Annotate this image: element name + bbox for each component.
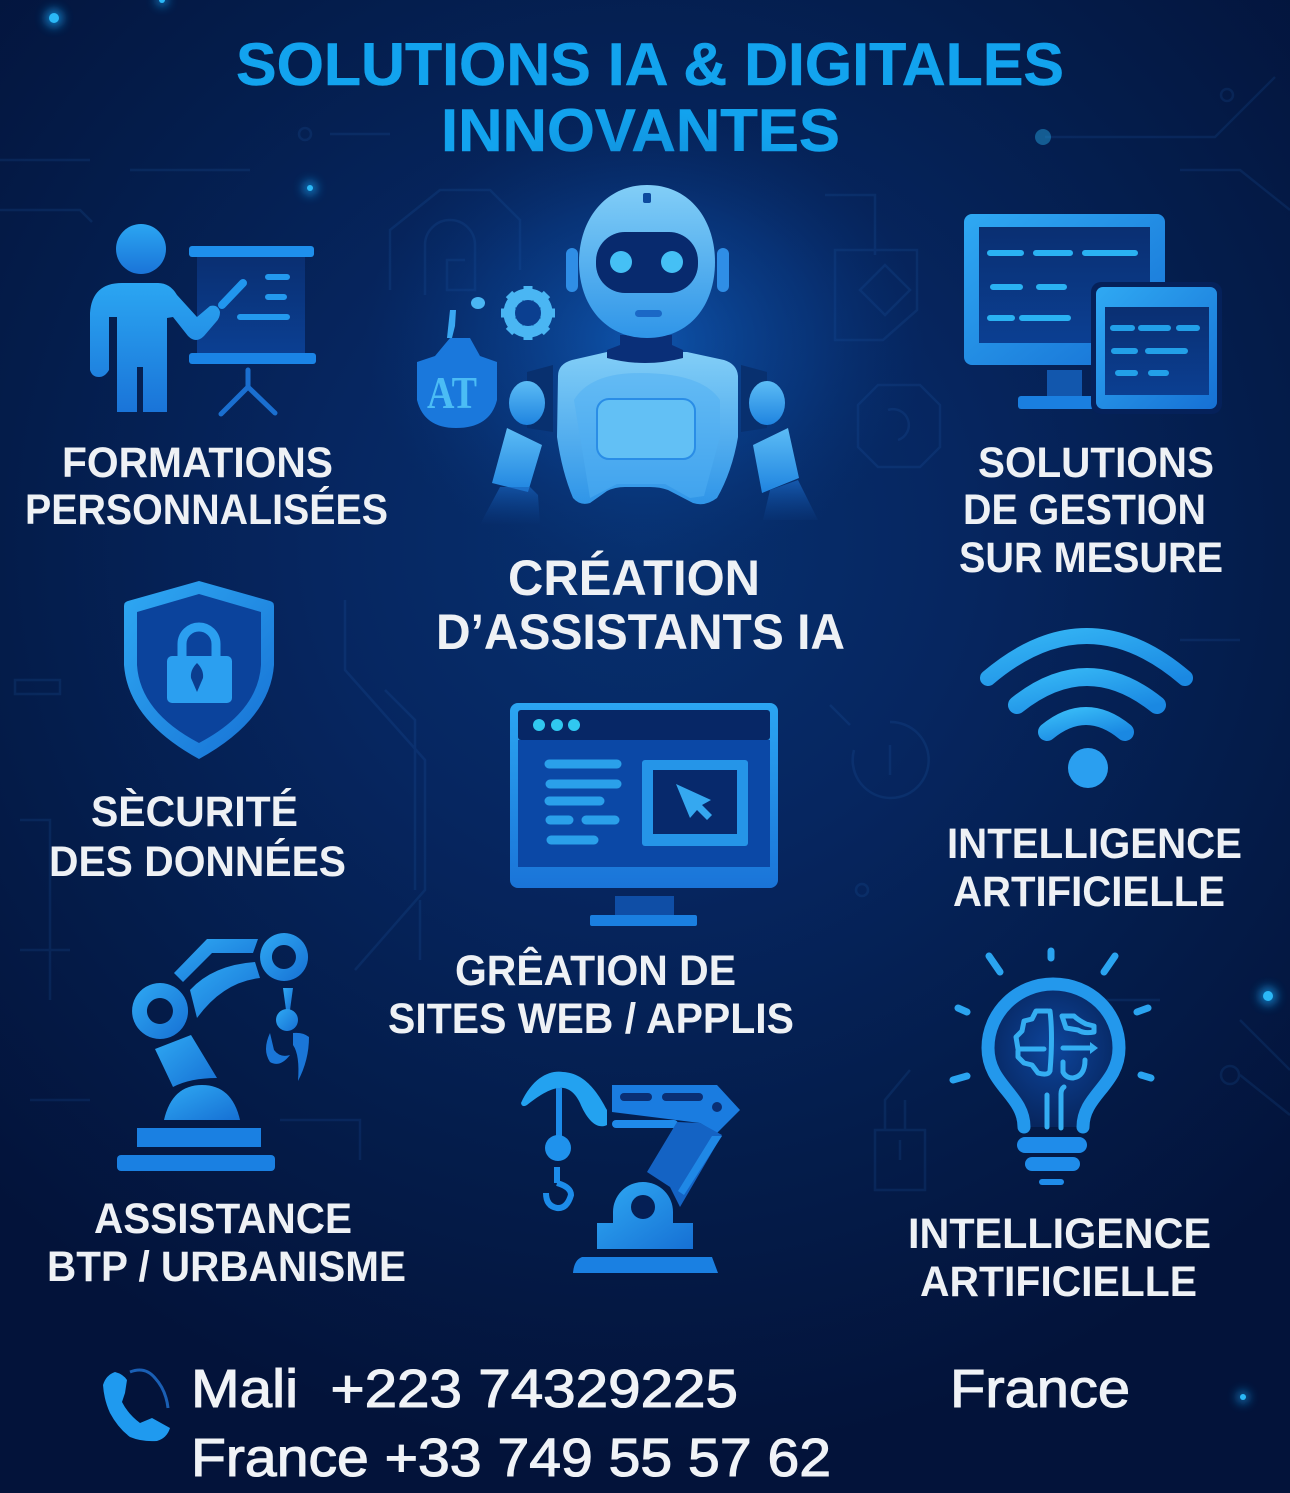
- window with cursor: [642, 760, 748, 846]
- label: security: DES DONNÉES: [49, 838, 346, 886]
- contact: France label: France: [950, 1359, 1130, 1419]
- label: intelligence artificielle 1: ARTIFICIELLE: [953, 868, 1225, 916]
- label: security: [49, 788, 346, 886]
- crane arm: [647, 1122, 722, 1207]
- contact: Mali phone: Mali +223 74329225: [191, 1359, 738, 1419]
- icon: security shield: [124, 581, 274, 759]
- crane boom: [612, 1085, 740, 1133]
- robot mouth: [635, 310, 662, 317]
- robot neck: [607, 335, 683, 363]
- text lines: [549, 764, 617, 840]
- crane hook: [546, 1088, 571, 1208]
- padlock: [167, 627, 232, 703]
- robot shoulders: [509, 381, 545, 425]
- label: assistants: D’ASSISTANTS IA: [436, 604, 845, 660]
- monitor header: [518, 710, 770, 740]
- arm segments: [174, 939, 258, 982]
- label: formations: [25, 439, 388, 534]
- label: web: GRÊATION DE: [455, 946, 736, 995]
- icon: phone: [103, 1370, 170, 1441]
- icon: trainer at presentation board: [90, 224, 316, 414]
- robot chest panel: [597, 399, 695, 459]
- board stand: [221, 370, 275, 414]
- icon: AI robot: [365, 110, 925, 570]
- board text lines: [240, 277, 287, 317]
- label: intelligence artificielle 2: INTELLIGENCE: [908, 1210, 1211, 1258]
- gear: [501, 286, 555, 340]
- robot ears: [566, 248, 578, 292]
- gripper: [283, 988, 293, 1010]
- label: web: SITES WEB / APPLIS: [388, 995, 794, 1043]
- rays: [953, 951, 1151, 1080]
- label: BTP: [47, 1195, 406, 1291]
- title: SOLUTIONS IA & DIGITALES: [236, 31, 1064, 98]
- label: gestion: DE GESTION: [963, 486, 1206, 534]
- label: security: SÈCURITÉ: [91, 788, 298, 836]
- robot head: [579, 185, 715, 338]
- pointer: [222, 283, 243, 305]
- board bars: [189, 246, 314, 257]
- bulb base: [1017, 1137, 1087, 1185]
- label: BTP: BTP / URBANISME: [47, 1243, 406, 1291]
- AI badge: AT: [427, 368, 477, 418]
- monitor frame: [964, 214, 1165, 365]
- monitor lines: [990, 253, 1135, 318]
- monitor screen: [518, 740, 770, 867]
- title: INNOVANTES: [441, 97, 840, 164]
- brain arrow: [1090, 1042, 1098, 1054]
- robot arms: [527, 365, 767, 432]
- background circuit pattern: [0, 77, 1290, 1190]
- robot eyes: [610, 251, 632, 273]
- robot visor: [596, 232, 698, 293]
- tablet lines: [1113, 328, 1197, 373]
- bulb glass: [988, 984, 1119, 1127]
- label: formations: FORMATIONS: [62, 439, 333, 487]
- floating dot: [471, 297, 485, 309]
- person: [90, 224, 220, 412]
- label: gestion: SUR MESURE: [959, 534, 1223, 582]
- tablet: [1091, 282, 1222, 414]
- monitor frame: [510, 703, 778, 888]
- label: web: [388, 946, 794, 1043]
- icon: website monitor: [510, 703, 778, 926]
- robot torso: [557, 352, 738, 504]
- label: intelligence artificielle 2: ARTIFICIELLE: [920, 1258, 1197, 1306]
- board screen: [197, 257, 305, 353]
- icon: wifi: [988, 636, 1185, 788]
- crane foot: [573, 1257, 718, 1273]
- icon: desktop and tablet software: [964, 214, 1222, 414]
- brain: [1016, 1011, 1094, 1128]
- label: formations: PERSONNALISÉES: [25, 486, 388, 534]
- shield inner: [137, 594, 261, 743]
- icon: light bulb with brain: [953, 951, 1151, 1185]
- title: [236, 31, 1064, 164]
- monitor stand: [615, 896, 674, 916]
- label: assistants: [436, 550, 845, 660]
- crane hook arc: [521, 1072, 607, 1126]
- monitor screen: [979, 227, 1150, 343]
- icon: robotic arm: [117, 933, 309, 1171]
- robot halo: [365, 110, 925, 570]
- arm dome: [164, 1085, 240, 1120]
- icon: crane: [521, 1072, 740, 1273]
- contact: France phone: France +33 749 55 57 62: [191, 1428, 831, 1488]
- label: intelligence artificielle 1: [947, 820, 1242, 916]
- label: gestion: SOLUTIONS: [978, 439, 1214, 487]
- label: intelligence artificielle 1: INTELLIGENCE: [947, 820, 1242, 868]
- arm joints: [132, 983, 188, 1039]
- label: gestion: [959, 439, 1223, 582]
- monitor stand: [1047, 370, 1082, 397]
- arm base: [137, 1128, 261, 1147]
- shield outer: [124, 581, 274, 759]
- AI badge: [417, 310, 497, 428]
- label: intelligence artificielle 2: [908, 1210, 1211, 1306]
- crane pedestal: [597, 1182, 693, 1249]
- label: assistants: CRÉATION: [508, 550, 760, 606]
- label: BTP: ASSISTANCE: [94, 1195, 352, 1243]
- window dots: [533, 719, 580, 731]
